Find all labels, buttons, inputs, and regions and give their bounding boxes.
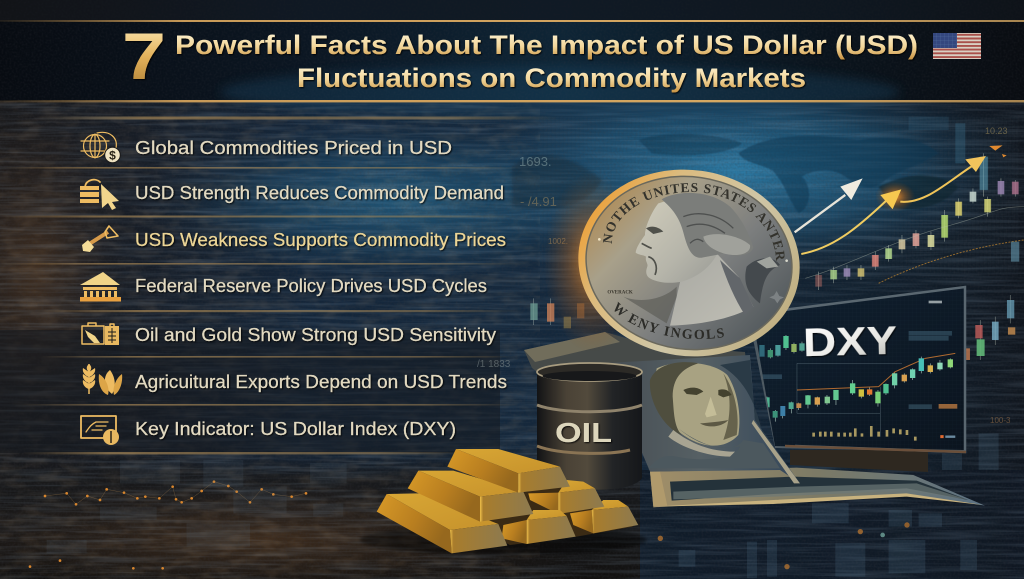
fact 6 label: Agricuitural Exports Depend on USD Trends — [135, 372, 507, 392]
Washington hair — [662, 193, 753, 258]
Washington portrait — [598, 193, 788, 326]
fact 1 label: Global Commodities Priced in USD — [135, 138, 452, 158]
barrel label: OIL — [555, 417, 612, 448]
gold bar: top — [447, 449, 570, 493]
arrow: gold trend arrow 2 — [900, 145, 1007, 202]
faded background numbers — [477, 126, 1011, 425]
fact 5 label: Oil and Gold Show Strong USD Sensitivity — [135, 325, 496, 345]
faded background numbers: /1 1833 — [477, 359, 511, 370]
monitor frame edge — [752, 287, 965, 452]
upper bill sheet — [600, 355, 800, 483]
DXY label: DXY — [802, 319, 898, 365]
fact 2: USD strength — [80, 180, 504, 210]
coin date: OVERACK — [607, 290, 633, 295]
fact 7: key indicator — [81, 416, 456, 445]
monitor with DXY chart — [745, 280, 970, 472]
fact 7 label: Key Indicator: US Dollar Index (DXY) — [135, 419, 456, 439]
coin legend bottom: W ENY INGOLS — [614, 302, 724, 340]
icon: bank building — [80, 272, 121, 302]
Franklin face — [656, 363, 739, 446]
fact 3: USD weakness — [82, 226, 506, 252]
fact 5: oil and gold — [82, 323, 496, 345]
icon: monitor with coin — [81, 416, 119, 445]
gold bar: middle — [408, 471, 533, 522]
icon: wheat and leaves — [83, 364, 122, 395]
back dollar bill — [524, 332, 752, 420]
fact 3 label: USD Weakness Supports Commodity Prices — [135, 230, 506, 250]
gold bars — [360, 449, 647, 555]
gold bar: back right upper — [528, 480, 604, 514]
oil barrel — [537, 363, 642, 490]
fact 4 label: Federal Reserve Policy Drives USD Cycles — [135, 276, 487, 296]
lower bill — [650, 468, 985, 507]
fact 6: agricultural exports — [83, 364, 507, 395]
arrow: gold trend arrow 1 — [801, 182, 915, 254]
arrows — [795, 145, 1007, 254]
list panel darkening — [0, 330, 500, 453]
icon: oil and gold cards — [82, 323, 119, 345]
faded background numbers: 100-3 — [990, 416, 1011, 425]
header band — [0, 20, 1024, 118]
gold stack shadow backing — [470, 483, 633, 545]
world map backdrop — [512, 117, 1019, 273]
icon: stacked coins with cursor — [80, 180, 119, 210]
gold bar: back centre — [502, 510, 576, 544]
faded background numbers: - /4.91 — [520, 194, 557, 209]
gold bar: bottom — [377, 493, 507, 553]
gold bar: back right lower — [570, 500, 638, 533]
fact 4: federal reserve — [80, 272, 487, 302]
icon: globe with dollar coin: $ — [109, 148, 116, 162]
icon: upward wrench arrow — [82, 226, 118, 252]
title — [122, 19, 918, 93]
title line 1: Powerful Facts About The Impact of US Dollar (USD) — [175, 30, 918, 60]
list dividers — [0, 116, 560, 454]
fact 1: global commodities — [81, 132, 452, 163]
coin glow — [544, 172, 640, 352]
faded background numbers: 1693. — [519, 154, 552, 169]
title line 2: Fluctuations on Commodity Markets — [297, 63, 806, 93]
bottom dotted line chart — [30, 460, 347, 568]
monitor screen — [748, 286, 966, 452]
faded background numbers: 10.23 — [985, 126, 1008, 136]
faded background numbers: 1002. — [548, 237, 568, 246]
coin — [578, 170, 800, 356]
arrow: white trend arrow — [795, 178, 863, 232]
coin rim — [566, 155, 812, 371]
background candlesticks right — [805, 153, 1024, 290]
title numeral 7: 7 — [122, 19, 166, 93]
dollar bill with Franklin portrait — [600, 355, 985, 507]
screen candles — [751, 302, 957, 441]
Franklin collar and coat — [648, 428, 780, 468]
icon: US flag — [933, 33, 981, 59]
coin sprig and star — [745, 258, 780, 303]
monitor stand — [790, 450, 928, 472]
fact 2 label: USD Strength Reduces Commodity Demand — [135, 183, 504, 203]
bottom right skyline bars — [660, 433, 999, 578]
coin field — [574, 162, 804, 364]
icon: globe with dollar coin — [81, 132, 120, 163]
